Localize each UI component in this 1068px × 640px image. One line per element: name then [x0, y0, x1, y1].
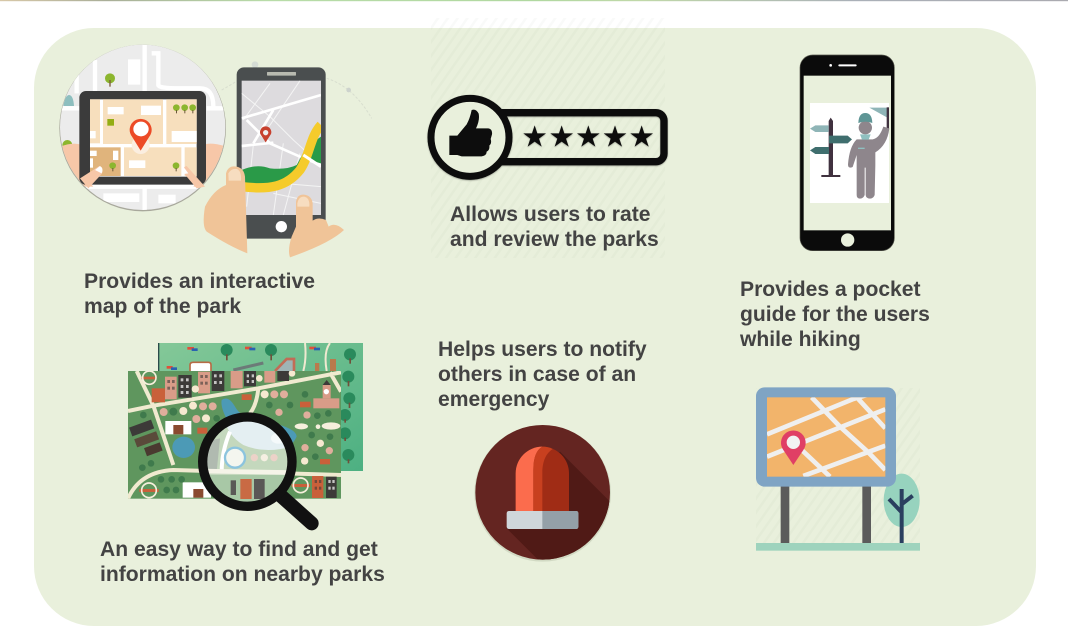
icon: park map billboard — [756, 387, 920, 551]
billboard pin — [781, 430, 806, 465]
roundabout signs — [142, 371, 308, 498]
building windows — [181, 374, 335, 490]
holding hand — [204, 166, 247, 253]
connection arcs — [222, 67, 372, 118]
text: nearby parks line 2: information on nearby parks — [100, 563, 385, 586]
round trees — [179, 370, 324, 465]
magnifier — [200, 415, 312, 523]
text: pocket guide line 2: guide for the users — [740, 303, 930, 326]
tablet hands — [80, 166, 102, 188]
text: interactive map: Provides an interactive — [84, 270, 315, 293]
icon: phone pocket guide — [800, 55, 894, 251]
hatched backdrop behind billboard — [756, 388, 920, 550]
ponds — [172, 437, 195, 458]
hiker guide — [848, 107, 889, 199]
text: pocket guide: Provides a pocket — [740, 278, 921, 301]
top colour strip — [0, 0, 1068, 1]
tablet — [79, 91, 206, 185]
hatched backdrop behind rating — [431, 18, 665, 258]
signpost — [810, 118, 852, 177]
icon: rating badge — [431, 98, 664, 176]
buildings — [165, 371, 339, 408]
circular tablet illustration — [59, 45, 227, 211]
text: rating: Allows users to rate — [450, 203, 651, 226]
back map — [158, 343, 363, 471]
text: emergency: Helps users to notify — [438, 338, 647, 361]
icon: nearby parks map with magnifier — [128, 343, 363, 523]
front map — [128, 370, 341, 499]
map pin — [132, 136, 150, 154]
siren base — [507, 511, 578, 529]
posts — [781, 485, 789, 543]
board — [756, 387, 896, 487]
text: emergency line 3: emergency — [438, 388, 550, 411]
text: nearby parks: An easy way to find and get — [100, 538, 378, 561]
paths — [128, 371, 341, 499]
icon: emergency siren — [474, 425, 611, 562]
siren dome — [516, 447, 569, 512]
ground — [756, 543, 920, 551]
thumb circle — [431, 98, 509, 176]
text: emergency line 2: others in case of an — [438, 363, 636, 386]
long shadow — [506, 452, 610, 560]
text: pocket guide line 3: while hiking — [739, 328, 861, 351]
thumbs up — [449, 110, 492, 156]
five stars — [523, 125, 653, 147]
clouds — [295, 422, 340, 430]
icon: interactive map — [59, 45, 372, 257]
text: interactive map line 2: map of the park — [84, 295, 241, 318]
white buildings — [165, 421, 211, 498]
rating bar — [487, 113, 664, 162]
tree — [884, 474, 920, 543]
phone — [204, 67, 344, 257]
text: rating line 2: and review the parks — [450, 228, 659, 251]
